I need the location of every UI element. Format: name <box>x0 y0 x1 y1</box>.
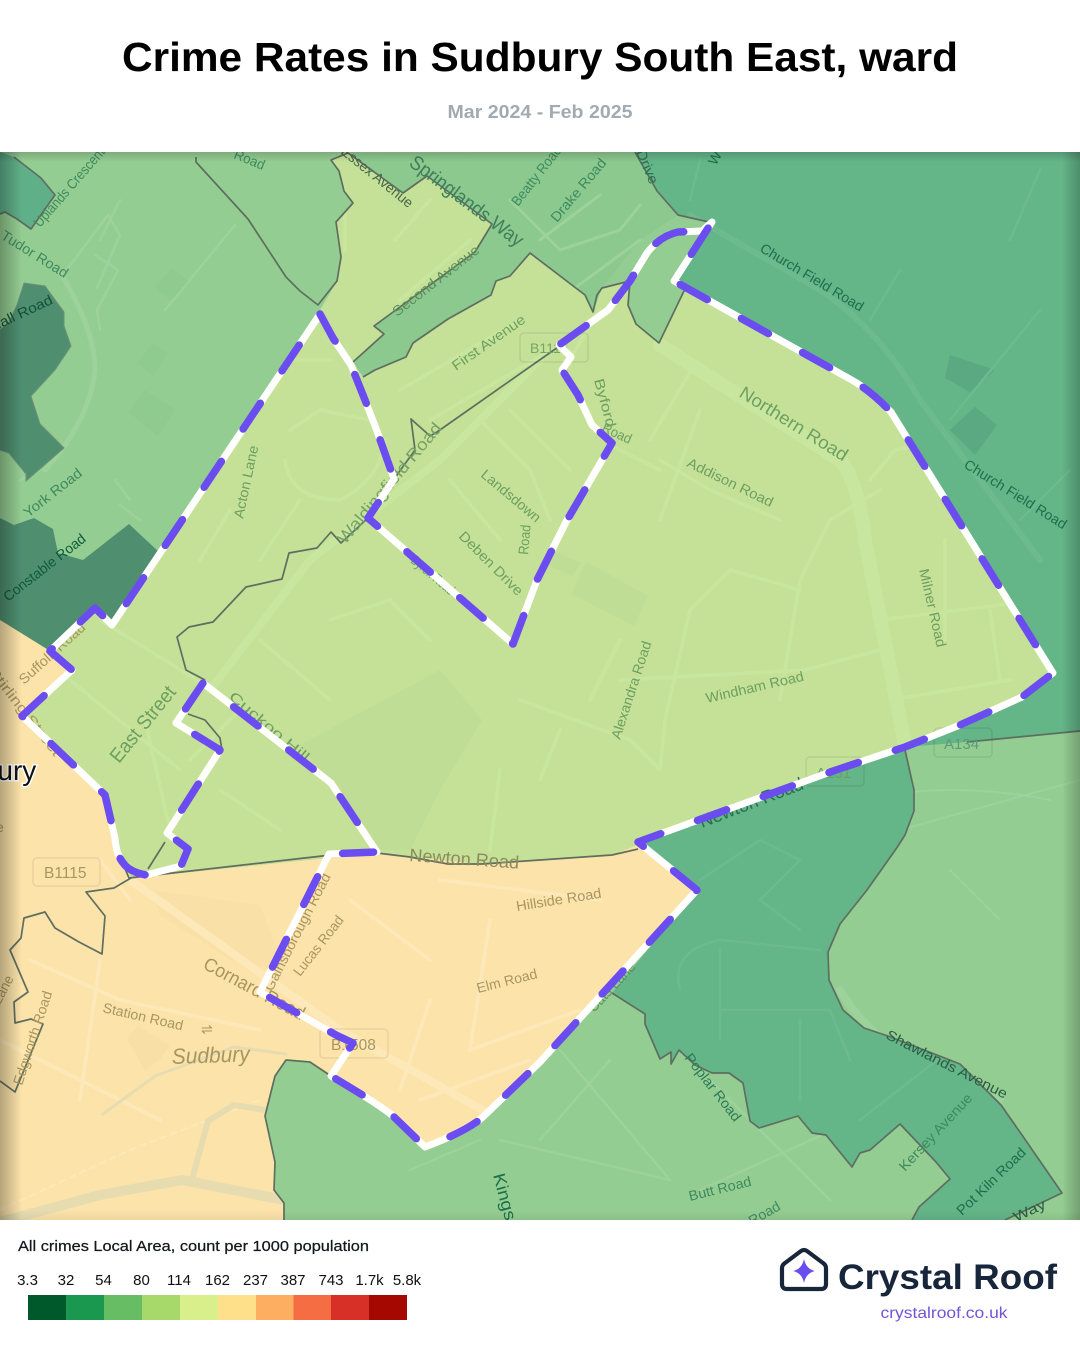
road name labels: Constable Road <box>0 530 89 604</box>
road name labels: Windham Road <box>704 668 805 706</box>
road name labels: Suffolk Road <box>15 619 88 687</box>
road name labels: Drive <box>633 147 662 187</box>
road name labels: Byford <box>591 377 619 429</box>
road name labels: Byron Road <box>408 552 458 598</box>
legend values: 80 <box>133 1272 150 1289</box>
river channel <box>0 1047 286 1222</box>
road name labels: Springlands Way <box>405 151 528 251</box>
legend values: 5.8k <box>393 1272 422 1289</box>
road shields: B1508 <box>331 1037 376 1054</box>
legend values: 237 <box>243 1272 268 1289</box>
road name labels: Kersey Avenue <box>895 1090 976 1174</box>
road name labels: Gainsborough Road <box>260 870 334 993</box>
legend values: 1.7k <box>355 1272 384 1289</box>
road name labels: Edgworth Road <box>10 989 55 1087</box>
area: yellow-green band, ward north <box>22 253 1053 878</box>
orange zone roads <box>0 860 600 1210</box>
road name labels: Waldingfield Road <box>334 419 446 548</box>
yellow zone roads <box>70 190 1040 850</box>
legend values: 54 <box>95 1272 112 1289</box>
road name labels: Church Field Road <box>757 240 867 314</box>
road name labels: Church Field Road <box>961 456 1070 532</box>
road name labels: Newton Road <box>696 774 806 832</box>
legend values: 387 <box>280 1272 306 1289</box>
road name labels: Lucas Road <box>290 912 347 979</box>
teal zone roads <box>678 160 1070 1120</box>
road name labels: East Street <box>106 681 181 767</box>
base area: medium green crime band <box>0 152 1080 1220</box>
road name labels: Road <box>515 524 534 555</box>
ward outline: white casing with purple dashes <box>22 222 1053 1147</box>
road name labels: Drake Road <box>547 155 609 225</box>
area: south-east teal band <box>612 750 1062 1220</box>
road name labels: Northern Road <box>736 382 852 465</box>
road shields: B1115 <box>44 865 87 882</box>
area: orange band around Sudbury centre <box>0 620 697 1220</box>
roads and land-use detail <box>0 160 1070 1222</box>
area: north-east teal band <box>635 152 1080 747</box>
road name labels: W <box>705 148 725 167</box>
area: top middle green strip <box>608 218 672 280</box>
ward and area boundaries <box>0 152 1080 1220</box>
road name labels <box>0 142 1070 1229</box>
area: south-west dark green patch <box>0 518 160 651</box>
legend values: 743 <box>318 1272 344 1289</box>
wordmark: Crystal Roof <box>838 1258 1057 1297</box>
town name: Sudbury: Sudbury <box>171 1041 252 1069</box>
road name labels: Acton Lane <box>230 444 261 520</box>
title: Crime Rates in Sudbury South East, ward <box>122 34 958 80</box>
road name labels: Cats Lane <box>584 959 639 1015</box>
road name labels: Elm Road <box>475 965 539 996</box>
road name labels: Cornard Road <box>200 954 308 1025</box>
road name labels: Road <box>600 419 635 447</box>
road name labels: Alexandra Road <box>608 639 654 741</box>
road shields <box>33 333 992 1058</box>
road name labels: Addison Road <box>685 454 776 510</box>
road name labels: Uplands Crescent <box>30 144 108 230</box>
legend values: 114 <box>167 1272 191 1289</box>
road name labels: Beatty Road <box>508 142 565 209</box>
road name labels: Tudor Road <box>0 227 71 281</box>
logo: Crystal Roof <box>782 1250 1057 1322</box>
road name labels: Butt Road <box>687 1173 753 1204</box>
road name labels: Deben Drive <box>456 528 527 599</box>
green zone roads <box>20 195 1080 1200</box>
road name labels: Cuckoo Hill <box>226 688 313 765</box>
legend title: All crimes Local Area, count per 1000 population <box>18 1238 369 1255</box>
road name labels: Landsdown <box>478 466 544 525</box>
legend colour scale <box>28 1295 407 1320</box>
road name labels: Pot Kiln Road <box>953 1144 1029 1218</box>
road name labels: Hillside Road <box>515 885 602 914</box>
legend values <box>17 1272 422 1289</box>
road name labels: Way <box>1011 1196 1048 1225</box>
road shields: B1115 <box>530 340 569 356</box>
road name labels: Station Road <box>101 999 185 1033</box>
road name labels: Milner Road <box>916 567 950 649</box>
road shields: A131 <box>816 765 851 782</box>
road name labels: York Road <box>20 465 85 520</box>
road name labels: Shawlands Avenue <box>884 1026 1011 1102</box>
area: yellow-green band, north of ward <box>320 153 492 362</box>
icon: house with star <box>782 1250 826 1289</box>
road name labels: Second Avenue <box>389 241 483 319</box>
road name labels: First Avenue <box>449 311 528 373</box>
date range subtitle: Mar 2024 - Feb 2025 <box>448 101 632 122</box>
road name labels: Kings <box>489 1171 520 1222</box>
road name labels: Essex Avenue <box>338 143 417 211</box>
area: west dark green patch <box>0 283 71 481</box>
legend <box>17 1238 422 1320</box>
legend values: 3.3 <box>17 1272 38 1289</box>
road name labels: Newton Road <box>409 845 520 873</box>
website: crystalroof.co.uk <box>880 1305 1009 1322</box>
legend values: 32 <box>58 1272 74 1289</box>
road name labels: Road <box>746 1198 783 1229</box>
area: top-left teal patch <box>0 152 55 229</box>
road name labels: Road <box>232 146 268 173</box>
road name labels: Poplar Road <box>682 1050 745 1124</box>
railway station symbol: ⇌ <box>201 1021 213 1037</box>
legend values: 162 <box>205 1272 230 1289</box>
road shields: A134 <box>944 736 979 753</box>
